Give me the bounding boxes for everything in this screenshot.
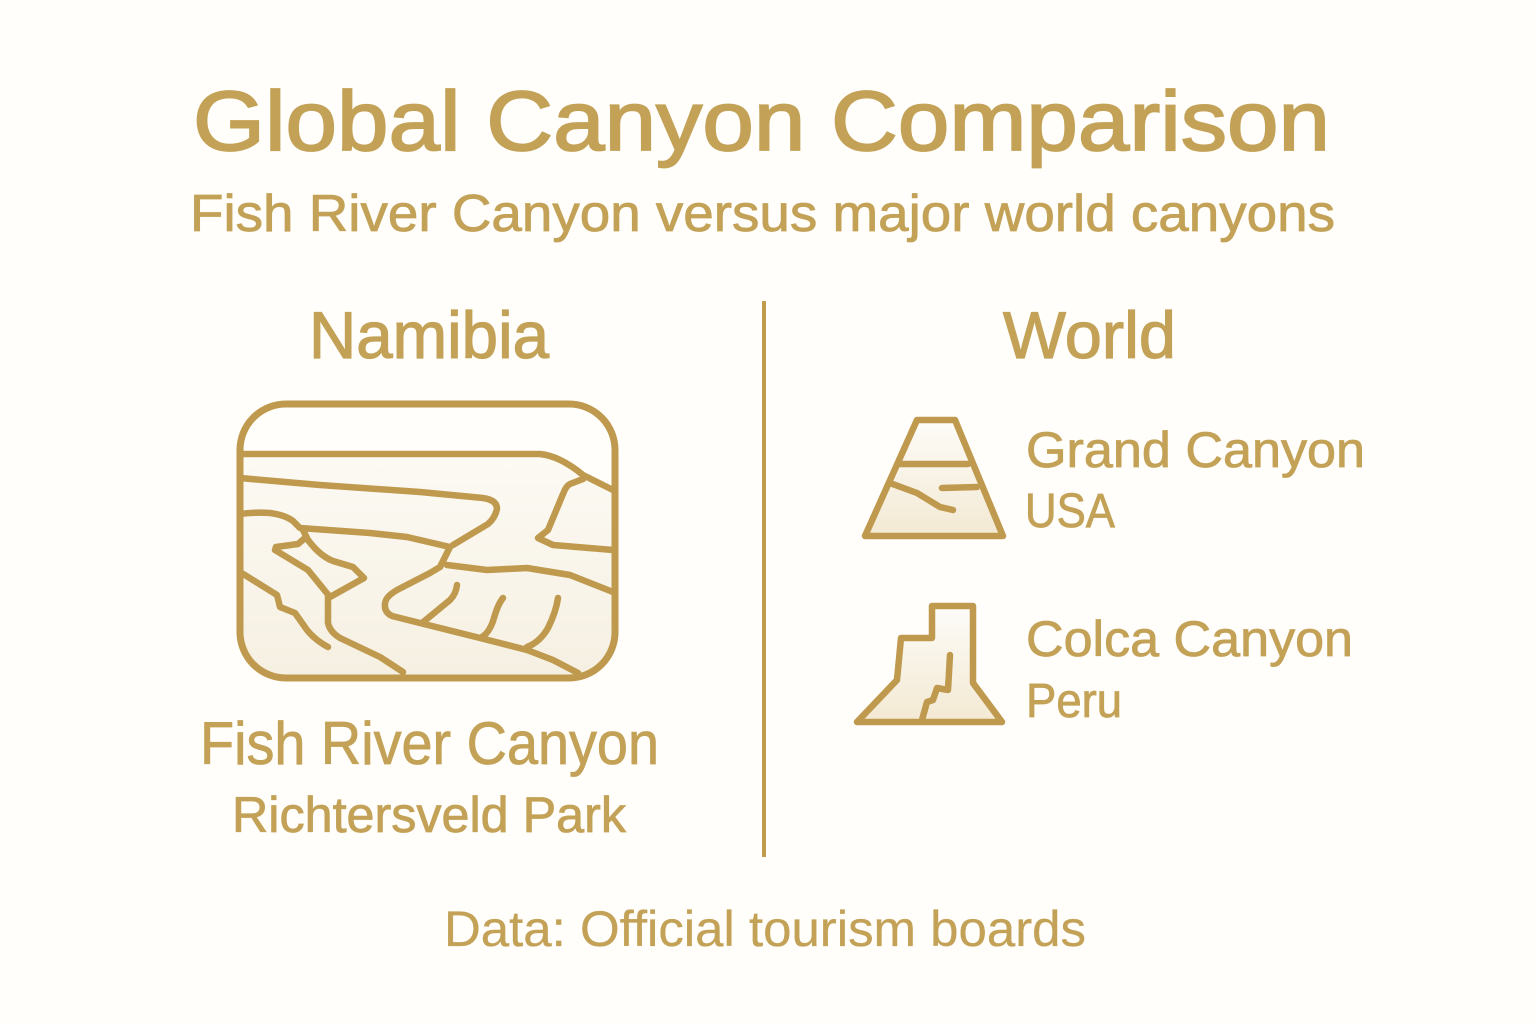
icon: Fish River Canyon landscape bbox=[240, 404, 615, 678]
divider bbox=[762, 301, 766, 857]
label: Fish River Canyon: Fish River Canyon bbox=[200, 710, 659, 777]
panel: World bbox=[857, 298, 1365, 728]
icon: Colca Canyon bbox=[857, 606, 1002, 722]
source note: Data: Official tourism boards bbox=[444, 901, 1086, 957]
label: Grand Canyon: Grand Canyon bbox=[1026, 422, 1365, 478]
label: USA: USA bbox=[1025, 485, 1115, 538]
title: Global Canyon Comparison bbox=[193, 74, 1330, 168]
label: Peru: Peru bbox=[1026, 675, 1122, 728]
panel: Namibia bbox=[200, 298, 659, 843]
label: Colca Canyon: Colca Canyon bbox=[1026, 611, 1353, 667]
subtitle: Fish River Canyon versus major world canyons bbox=[190, 185, 1335, 243]
label: Richtersveld Park: Richtersveld Park bbox=[232, 787, 627, 843]
icon: Grand Canyon bbox=[865, 420, 1003, 536]
heading: World: World bbox=[1003, 298, 1176, 372]
heading: Namibia: Namibia bbox=[309, 298, 549, 372]
